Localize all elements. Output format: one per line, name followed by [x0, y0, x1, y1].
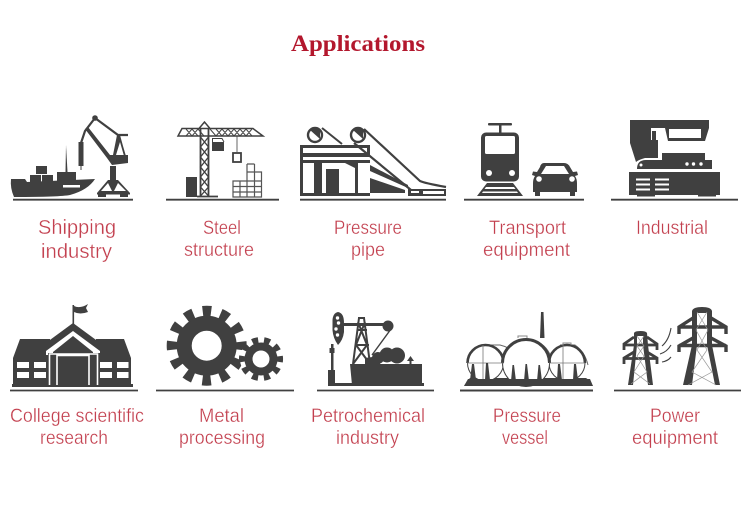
label — [311, 406, 425, 449]
panel: steel structure — [166, 122, 279, 261]
icon: ship and port crane — [11, 115, 130, 197]
large tower — [679, 307, 726, 385]
label: processing — [179, 428, 265, 449]
label: Pressure — [334, 218, 402, 239]
label: Power — [650, 406, 701, 427]
icon: pipe mill — [300, 128, 446, 196]
label — [483, 218, 571, 261]
icon: machine tool — [629, 120, 720, 196]
label — [632, 406, 719, 449]
label — [184, 218, 254, 261]
label: Industrial — [636, 218, 708, 239]
panel: pressure pipe — [300, 128, 446, 261]
label: equipment — [483, 240, 571, 261]
icon: transmission towers — [624, 307, 726, 385]
label: Petrochemical — [311, 406, 425, 427]
icon: gears — [172, 311, 282, 380]
label: pipe — [351, 240, 385, 261]
label — [38, 216, 116, 263]
panel: metal processing — [156, 311, 294, 449]
icon: school building — [12, 304, 133, 387]
label — [10, 406, 144, 449]
icon: train and car — [477, 123, 578, 196]
panel: petrochemical industry — [311, 312, 434, 449]
label: Transport — [489, 218, 567, 239]
small tower — [624, 331, 657, 385]
label: College scientific — [10, 406, 144, 427]
label — [493, 406, 561, 449]
panel: pressure vessel — [460, 312, 593, 449]
label: Pressure — [493, 406, 561, 427]
panel: transport equipment — [464, 123, 584, 261]
panel: college scientific research — [10, 304, 144, 449]
icon: oil pump jack — [328, 312, 424, 386]
label: industry — [41, 240, 113, 263]
panel: industrial — [611, 120, 738, 239]
label: Steel — [203, 218, 241, 239]
icon: spherical tanks — [464, 312, 593, 386]
label: industry — [336, 428, 399, 449]
title: Applications — [291, 31, 425, 56]
label: equipment — [632, 428, 719, 449]
signal arcs — [660, 328, 671, 362]
label: Metal — [199, 406, 244, 427]
icon: tower crane — [178, 122, 263, 197]
label: Shipping — [38, 216, 116, 239]
label: vessel — [502, 428, 548, 449]
label — [334, 218, 402, 261]
panel: power equipment — [614, 307, 741, 449]
label: structure — [184, 240, 254, 261]
panel: shipping industry — [11, 115, 133, 263]
label — [179, 406, 265, 449]
label: research — [40, 428, 108, 449]
